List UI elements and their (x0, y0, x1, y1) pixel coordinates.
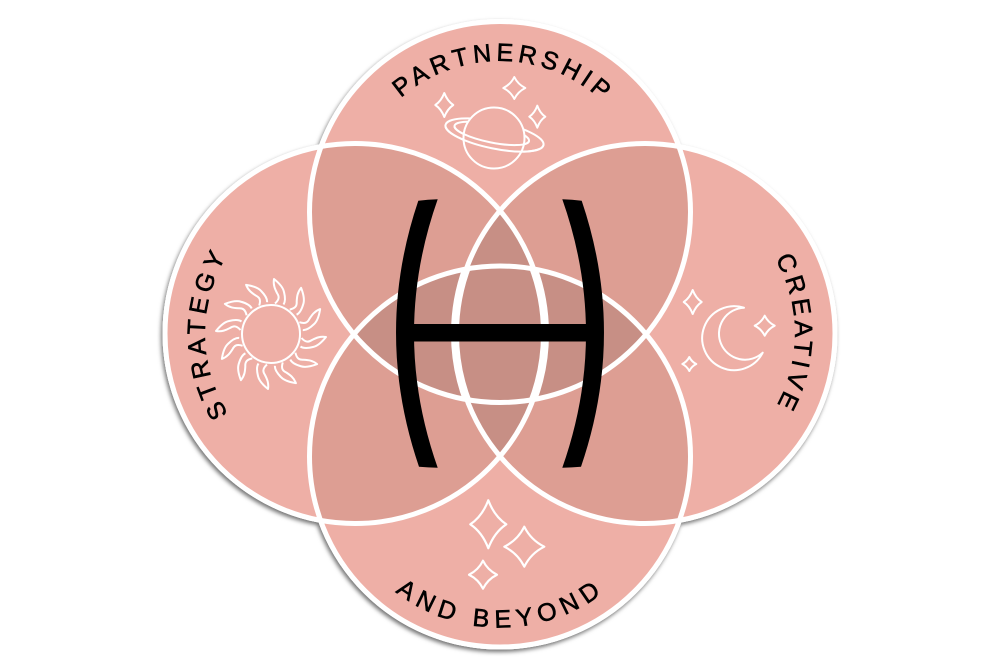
icon: moon with stars (682, 290, 775, 371)
icon: planet with stars (435, 77, 546, 168)
heading: and beyond: AND BEYOND (394, 581, 598, 628)
heading: strategy: STRATEGY (187, 248, 226, 420)
icon: three stars (469, 500, 544, 589)
panel: central lenses (310, 144, 835, 647)
circle outlines (165, 22, 835, 647)
outer outline with shadow (162, 19, 838, 650)
panel: circles base (165, 22, 835, 647)
venn diagram (162, 19, 838, 650)
panel: pair overlaps (312, 146, 688, 521)
icon: sun (216, 279, 326, 389)
logo: H with brackets (396, 199, 604, 468)
heading: partnership: PARTNERSHIP (391, 43, 610, 97)
heading: creative: CREATIVE (777, 254, 813, 412)
